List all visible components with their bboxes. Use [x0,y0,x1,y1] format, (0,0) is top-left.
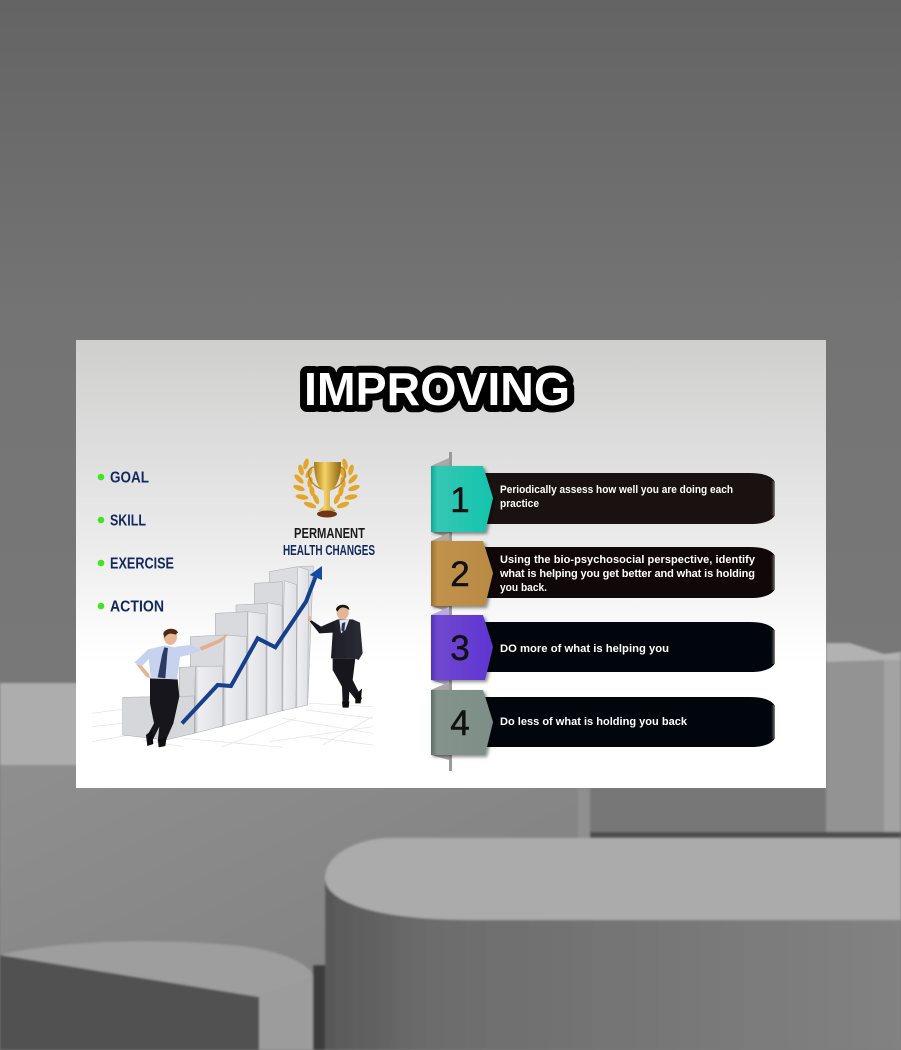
step 3 number: 3 [450,629,470,668]
step 3 dark bar [480,622,775,672]
step 2 gold number tag [431,541,493,606]
businessman in dark suit [308,605,363,708]
step 2 folded tag [431,533,449,612]
step 1 folded tag [431,458,449,538]
step 4 folded tag [431,682,449,760]
step 4 dark bar [480,697,775,747]
heading: permanent health changes: PERMANENT [294,525,365,542]
icon: gold trophy with laurels [293,458,360,518]
vertical pole [449,452,452,771]
step 1 text [500,484,733,510]
title: IMPROVING [304,363,570,415]
step 2 text: what is helping you get better and what is holding [499,568,755,580]
step 1 text: practice [500,498,539,510]
heading: permanent health changes: HEALTH CHANGES [283,542,375,559]
step 1 teal number tag [431,466,493,532]
rising blue arrow [182,566,322,723]
step 4 sage number tag [431,690,493,755]
bullet list [98,470,174,616]
step 4 text: Do less of what is holding you back [500,716,688,728]
step 1 dark bar [480,473,775,524]
step 4 [431,682,775,760]
step 1 number: 1 [450,481,470,520]
step 2 [431,533,775,612]
step 1 text: Periodically assess how well you are doing each [500,484,733,496]
step 2 number: 2 [450,555,470,594]
bullet list: EXERCISE [110,556,174,572]
step 3 bar end fold [770,630,775,664]
step 4 number: 4 [450,704,470,743]
step 2 text [499,554,756,594]
step 2 dark bar [480,547,775,598]
bullet list: GOAL [110,470,149,486]
step 3 folded tag [431,607,449,686]
step 2 text: you back. [500,582,547,594]
bullet list: ACTION [110,598,164,616]
step 2 bar end fold [770,555,775,590]
bullet list: SKILL [110,512,146,530]
white stepped bars [123,566,313,740]
step 3 purple number tag [431,615,493,680]
step 3 [431,607,775,686]
perspective floor grid [92,703,373,747]
slide panel [76,340,826,788]
step 4 bar end fold [770,705,775,739]
illustration: staircase bar chart with two businessmen [92,566,373,747]
step 3 text: DO more of what is helping you [500,643,669,655]
heading: permanent health changes [283,525,375,559]
step 2 text: Using the bio-psychosocial perspective, identify [500,554,756,566]
businessman leaning on chart [134,628,229,747]
step 1 bar end fold [770,481,775,516]
step 1 [431,458,775,538]
